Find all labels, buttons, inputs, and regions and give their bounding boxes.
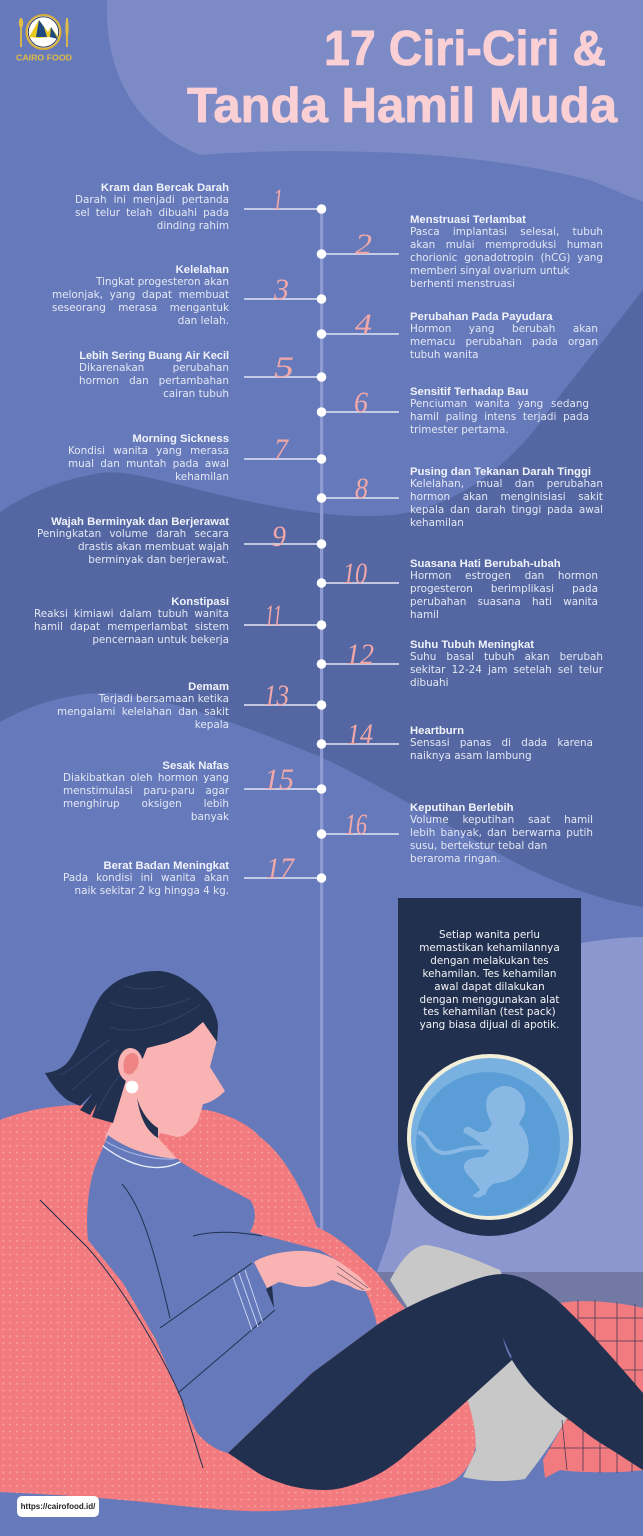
item 12: dibuahi [410, 677, 449, 689]
item 17: naik sekitar 2 kg hingga 4 kg. [75, 885, 229, 897]
item 6: hamil paling intens terjadi pada [410, 411, 589, 423]
item 10: hamil [410, 609, 439, 621]
numbers 1 to 17: 3 [273, 273, 289, 306]
numbers 1 to 17: 1 [273, 183, 283, 216]
background: top light wave [107, 0, 643, 202]
card text: dengan menggunakan alat [419, 994, 560, 1006]
item 6: Sensitif Terhadap Bau [410, 386, 528, 398]
item 9: berminyak dan berjerawat. [88, 554, 229, 566]
item 15: banyak [191, 811, 229, 823]
item 8 [410, 466, 603, 529]
item 11 [34, 596, 229, 646]
woman figure [40, 971, 643, 1490]
item 10: perubahan suasana hati wanita [410, 596, 598, 608]
navy card [398, 898, 581, 1236]
neck and face [105, 1020, 225, 1162]
item 6 [410, 386, 589, 436]
item 3 [52, 264, 229, 327]
timeline [244, 204, 399, 1238]
numbers 1 to 17: 11 [265, 599, 282, 632]
item 14 [410, 725, 593, 762]
item 4: Hormon yang berubah akan [410, 323, 598, 335]
item 1: sel telur telah dibuahi pada [75, 207, 229, 219]
item 14: Heartburn [410, 725, 464, 737]
item 6: Penciuman wanita yang sedang [410, 398, 589, 410]
logo: Cairo Food: CAIRO FOOD [16, 52, 72, 62]
title [187, 22, 618, 133]
earring [126, 1081, 138, 1093]
item 9: Wajah Berminyak dan Berjerawat [51, 516, 229, 528]
hair streaks [60, 986, 200, 1110]
item 9: Peningkatan volume darah secara [37, 528, 229, 540]
finger lines and cuff shadow [266, 1266, 368, 1308]
gray pillow [390, 1245, 567, 1481]
card text [419, 929, 560, 1031]
item 11: Konstipasi [171, 596, 229, 608]
item 5 [79, 350, 229, 400]
item 4 [410, 311, 598, 361]
item 3: melonjak, yang dapat membuat [52, 289, 229, 301]
umbilical cord [418, 1132, 490, 1153]
item 10: Hormon estrogen dan hormon [410, 570, 598, 582]
item 16: beraroma ringan. [410, 853, 500, 865]
card text: Setiap wanita perlu [439, 929, 540, 941]
url badge [17, 1496, 99, 1517]
item 12 [410, 639, 604, 689]
item 13: kepala [195, 719, 229, 731]
title: 17 Ciri-Ciri & [324, 22, 606, 76]
numbers 1 to 17: 5 [274, 351, 294, 384]
item 11: pencernaan untuk bekerja [92, 634, 229, 646]
item 9 [37, 516, 229, 566]
item 7: kehamilan [175, 471, 229, 483]
item 3: seseorang merasa mengantuk [52, 302, 229, 314]
item 12: Suhu basal tubuh akan berubah [410, 651, 603, 663]
sleeve cuff stripes [233, 1270, 262, 1330]
item 12: Suhu Tubuh Meningkat [410, 639, 534, 651]
hair [45, 971, 218, 1123]
card text: memastikan kehamilannya [419, 942, 560, 954]
item 15: Diakibatkan oleh hormon yang [63, 772, 229, 784]
pink checkered pillow [543, 1300, 643, 1478]
numbers 1 to 17: 14 [347, 718, 373, 751]
collar stripes [103, 1141, 180, 1167]
item 5: cairan tubuh [163, 388, 229, 400]
item 16: lebih banyak, dan berwarna putih [410, 827, 593, 839]
numbers 1 to 17: 15 [264, 763, 294, 796]
item 11: Reaksi kimiawi dalam tubuh wanita [34, 608, 229, 620]
shirt [87, 1135, 377, 1453]
numbers 1 to 17: 6 [354, 386, 368, 419]
card text: awal dapat dilakukan [434, 981, 545, 993]
item 13 [57, 681, 229, 731]
item 1: Kram dan Bercak Darah [101, 182, 229, 194]
numbers 1 to 17: 7 [274, 433, 290, 466]
item 14: naiknya asam lambung [410, 750, 532, 762]
item 13: mengalami kelelahan dan sakit [57, 706, 229, 718]
item 13: Demam [188, 681, 229, 693]
card text: tes kehamilan (test pack) [423, 1006, 556, 1018]
item 2: akan mulai memproduksi human [410, 239, 603, 251]
item 2: memberi sinyal ovarium untuk [410, 265, 570, 277]
item 5: hormon dan pertambahan [79, 375, 229, 387]
leg [228, 1274, 643, 1490]
item 10: progesteron berimplikasi pada [410, 583, 598, 595]
background: wall band [377, 1272, 643, 1332]
item 4: tubuh wanita [410, 349, 479, 361]
numbers 1 to 17: 12 [346, 638, 374, 671]
item 3: Tingkat progesteron akan [96, 276, 229, 288]
shirt folds [40, 1184, 275, 1468]
item 1 [75, 182, 229, 232]
item 17 [63, 860, 229, 897]
item 6: trimester pertama. [410, 424, 509, 436]
numbers 1 to 17: 13 [264, 679, 289, 712]
numbers 1 to 17: 16 [345, 808, 367, 841]
numbers 1 to 17: 17 [266, 852, 296, 885]
item 10 [410, 558, 598, 621]
item 7: Kondisi wanita yang merasa [68, 445, 229, 457]
card text: yang biasa dijual di apotik. [420, 1019, 559, 1031]
item 8: hormon akan menginisiasi sakit [410, 491, 603, 503]
item 7: mual dan muntah pada awal [68, 458, 229, 470]
numbers 1 to 17: 10 [343, 557, 367, 590]
item 5: Lebih Sering Buang Air Kecil [79, 350, 229, 362]
item 8: Pusing dan Tekanan Darah Tinggi [410, 466, 591, 478]
item 15: Sesak Nafas [162, 760, 229, 772]
item 17: Pada kondisi ini wanita akan [63, 872, 229, 884]
numbers 1 to 17: 2 [355, 228, 372, 261]
hand [254, 1251, 371, 1291]
item 7 [68, 433, 229, 483]
item 8: Kelelahan, mual dan perubahan [410, 478, 603, 490]
item 2: Pasca implantasi selesai, tubuh [410, 226, 603, 238]
item 9: drastis akan membuat wajah [78, 541, 229, 553]
item 5: Dikarenakan perubahan [79, 362, 229, 374]
background: lower right light panel [377, 937, 643, 1272]
item 3: Kelelahan [176, 264, 229, 276]
item 16: susu, bertekstur tebal dan [410, 840, 547, 852]
card text: dengan melakukan tes [430, 955, 549, 967]
knee crease [503, 1338, 512, 1359]
item 8: kehamilan [410, 517, 464, 529]
item 4: Perubahan Pada Payudara [410, 311, 553, 323]
item 8: kepala dan darah tinggi pada awal [410, 504, 603, 516]
item 15: menghirup oksigen lebih [63, 798, 229, 810]
title: Tanda Hamil Muda [187, 79, 618, 133]
item 2: chorionic gonadotropin (hCG) yang [410, 252, 603, 264]
item 2: berhenti menstruasi [410, 278, 515, 290]
item 15: menstimulasi paru-paru agar [63, 785, 229, 797]
item 1: dinding rahim [157, 220, 229, 232]
numbers 1 to 17: 4 [355, 308, 372, 341]
item 2: Menstruasi Terlambat [410, 214, 526, 226]
item 17: Berat Badan Meningkat [103, 860, 229, 872]
item 11: hamil dapat memperlambat sistem [34, 621, 229, 633]
item 16 [410, 802, 593, 865]
bean bag [0, 1105, 476, 1511]
card text: kehamilan. Tes kehamilan [422, 968, 556, 980]
url badge: https://cairofood.id/ [21, 1502, 95, 1511]
item 4: memacu perubahan pada organ [410, 336, 598, 348]
dark hair wisp [137, 1097, 158, 1138]
item 10: Suasana Hati Berubah-ubah [410, 558, 561, 570]
item 16: Volume keputihan saat hamil [410, 814, 593, 826]
item 3: dan lelah. [178, 315, 229, 327]
item 12: sekitar 12-24 jam setelah sel telur [410, 664, 603, 676]
item 1: Darah ini menjadi pertanda [75, 194, 229, 206]
item 14: Sensasi panas di dada karena [410, 737, 593, 749]
background: dark middle wave [0, 290, 643, 907]
item 2 [410, 214, 603, 290]
numbers 1 to 17 [264, 183, 374, 885]
item 16: Keputihan Berlebih [410, 802, 514, 814]
item 15 [63, 760, 230, 823]
item 13: Terjadi bersamaan ketika [99, 693, 229, 705]
numbers 1 to 17: 9 [272, 520, 286, 553]
fetus [463, 1086, 529, 1198]
item 7: Morning Sickness [132, 433, 229, 445]
ear [118, 1048, 143, 1082]
logo: Cairo Food [16, 15, 72, 62]
womb circle with fetus [407, 1054, 573, 1220]
numbers 1 to 17: 8 [355, 472, 368, 505]
